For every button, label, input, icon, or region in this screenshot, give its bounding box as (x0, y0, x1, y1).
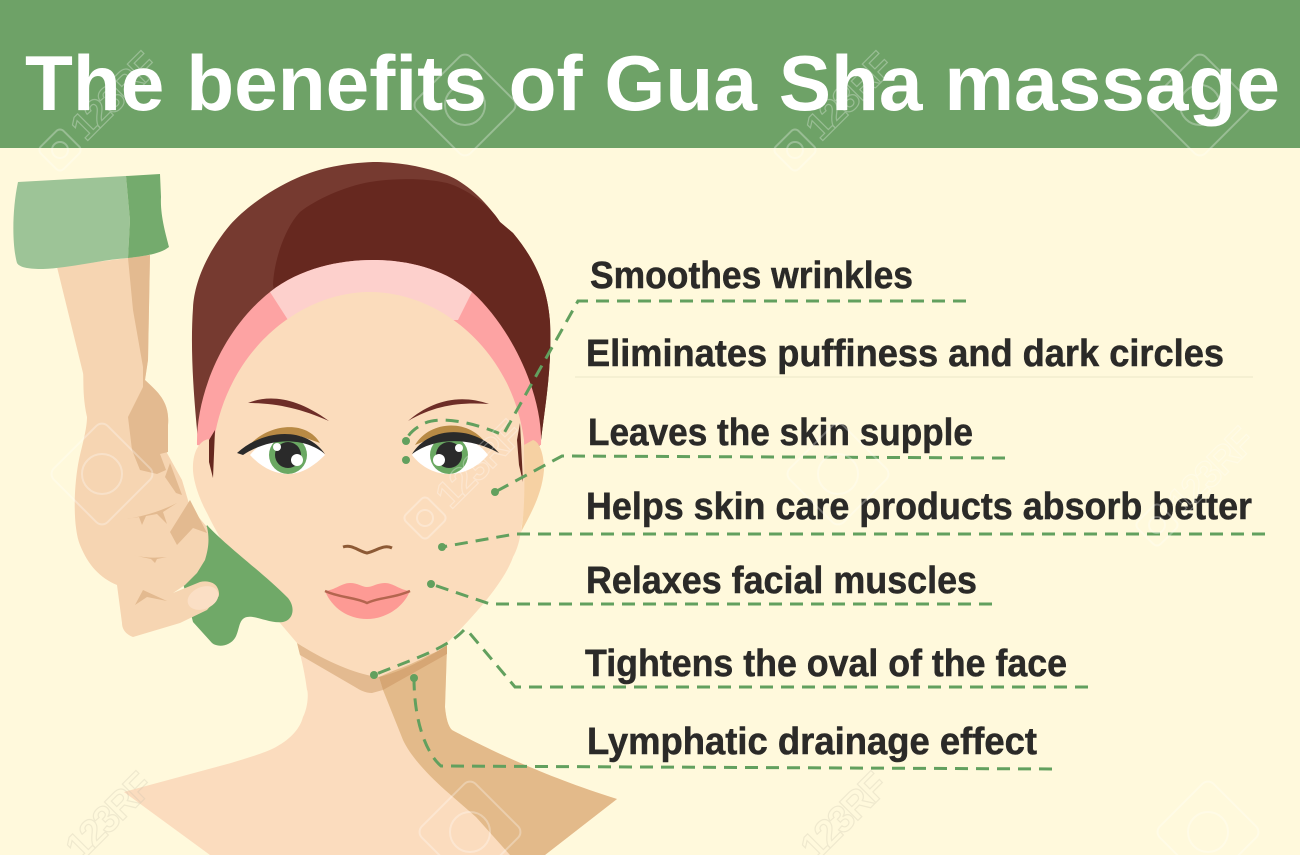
illustration: woman's face (124, 162, 617, 855)
hair (192, 162, 550, 477)
sleeve dark part (126, 174, 169, 258)
finger creases (120, 463, 207, 605)
watermarks: 123RF (1160, 420, 1264, 524)
benefit 3: Leaves the skin supple (588, 412, 973, 454)
icon: thumb nail (184, 582, 222, 614)
neck shadow (379, 647, 617, 855)
benefit 1: Smoothes wrinkles (590, 255, 913, 297)
callout line: smoothes wrinkles (406, 301, 966, 441)
watermarks: 123RF (798, 45, 902, 149)
title: The benefits of Gua Sha massage (25, 39, 1280, 127)
chin shadow dark (379, 645, 447, 690)
hair dark side (273, 179, 550, 480)
hair strands (209, 423, 523, 482)
headband sides (197, 260, 541, 470)
right eye (412, 425, 499, 474)
callout line: tightens oval (467, 630, 1088, 687)
illustration: hand holding gua sha tool (13, 174, 293, 646)
arm shadow (128, 255, 168, 474)
callout dots (370, 437, 499, 682)
icon: gua sha stone (183, 525, 293, 646)
benefit 4: Helps skin care products absorb better (586, 486, 1252, 528)
callout line: absorb better (442, 534, 1265, 547)
chin shadow (297, 643, 383, 693)
benefits list (585, 255, 1252, 763)
arm and hand (57, 255, 219, 637)
watermarks: 123RF (428, 413, 532, 517)
title banner (0, 0, 1300, 148)
lips (325, 583, 410, 619)
neck and shoulders (124, 647, 617, 855)
benefit 7: Lymphatic drainage effect (587, 721, 1037, 763)
watermarks: 123RF (63, 45, 167, 149)
callout lines and dots (370, 301, 1265, 769)
nose (343, 546, 392, 553)
benefit 6: Tightens the oval of the face (585, 643, 1067, 685)
callout line: jawline (374, 630, 464, 675)
eyebrows (248, 398, 489, 421)
face (193, 292, 525, 676)
callout line: relaxes muscles (431, 584, 992, 604)
left eye (237, 427, 325, 474)
headband top (270, 260, 472, 320)
benefit 2: Eliminates puffiness and dark circles (586, 333, 1224, 375)
sleeve light part (13, 176, 130, 269)
thin divider line (575, 376, 1253, 378)
callout line: leaves skin supple (495, 456, 1005, 492)
callout line: lymphatic (414, 678, 1052, 769)
right ear (521, 440, 544, 532)
benefit 5: Relaxes facial muscles (586, 560, 977, 602)
